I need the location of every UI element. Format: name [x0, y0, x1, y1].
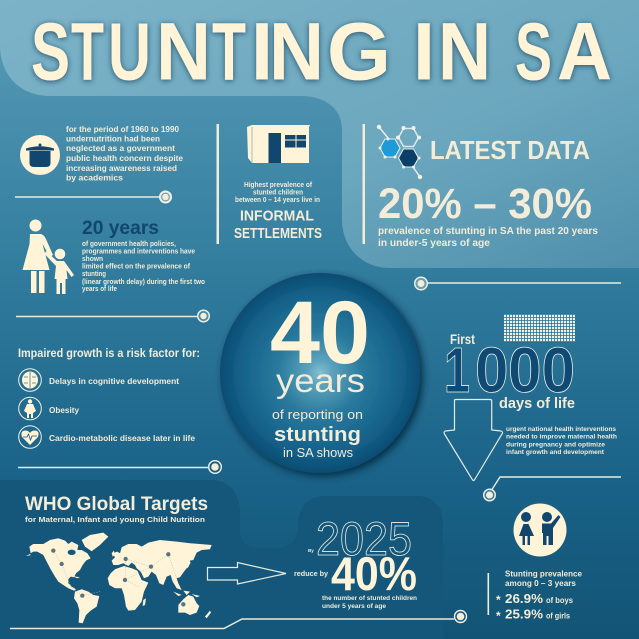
informal settlements block	[234, 125, 322, 242]
text: stunted children	[322, 595, 417, 610]
icon: brain	[19, 369, 41, 391]
text: government policies	[82, 241, 205, 293]
text: neglect of undernutrition	[66, 125, 184, 182]
history text block	[20, 125, 184, 182]
text: stunting prevalence: Stunting prevalence	[505, 568, 582, 578]
icon: boy and girl	[514, 504, 566, 556]
stat: 40 percent: 40%	[331, 547, 417, 600]
stunting prevalence block	[488, 504, 582, 623]
title: N	[438, 6, 491, 98]
text: prevalence	[378, 226, 598, 249]
text: stunting prevalence	[505, 568, 582, 588]
title: S	[31, 6, 70, 98]
text: neglect of undernutrition: by academics	[66, 174, 124, 182]
title: I	[413, 6, 435, 98]
text: first: First	[450, 332, 475, 347]
text: government policies: of government health policies,	[82, 241, 176, 248]
latest data block	[377, 125, 598, 249]
stat: 20% to 30%: 20% – 30%	[378, 180, 592, 228]
text: days of life: days of life	[499, 396, 575, 412]
heading: 20 years: 20 years	[82, 218, 159, 239]
text: stunted children: the number of stunted children	[322, 595, 417, 602]
text: neglect of undernutrition: neglected as a government	[66, 144, 175, 153]
text: neglect of undernutrition: increasing awareness raised	[66, 164, 177, 173]
central circle: 40 years: 40	[270, 282, 370, 382]
text: urgent interventions: urgent national health interventions	[506, 426, 616, 433]
text: government policies: stunting	[82, 271, 106, 278]
text: reduce by: reduce by	[294, 571, 328, 578]
arrow: right	[208, 562, 286, 584]
text: neglect of undernutrition: undernutrition had been	[66, 134, 160, 144]
stat: 1000: 0	[542, 334, 575, 406]
text: urgent interventions: during pregnancy and optimize	[506, 442, 605, 448]
arrow: down	[444, 400, 503, 480]
dot grid	[504, 314, 575, 342]
text: by: By	[308, 548, 314, 553]
text: prevalence: in under-5 years of age	[378, 238, 490, 249]
central circle: 40 years: in SA shows	[283, 446, 353, 460]
stat: boys: of boys	[546, 595, 573, 605]
world map	[26, 533, 212, 623]
text: informal settlements: Highest prevalence of	[244, 182, 313, 189]
stat: girls: *	[496, 609, 501, 623]
WHO block	[25, 494, 417, 623]
icon: heart	[19, 426, 41, 448]
central circle: 40 years	[220, 273, 420, 473]
title: T	[71, 6, 104, 98]
text: urgent interventions: needed to improve maternal health	[506, 434, 617, 440]
title: U	[108, 6, 151, 98]
title: A	[557, 6, 612, 98]
text: government policies: (linear growth delay) during the first two	[82, 279, 205, 286]
stat: girls: of girls	[546, 610, 570, 620]
stat: 2025: 2025	[316, 512, 412, 565]
text: government policies: programmes and interventions have	[82, 248, 195, 256]
icon: molecule	[377, 125, 422, 179]
stat: 1000: 0	[508, 334, 542, 406]
text: subheading: for Maternal, Infant and young Child Nutrition	[25, 515, 205, 524]
heading: impaired growth: Impaired growth is a risk factor for:	[18, 348, 200, 360]
text: government policies: years of life	[82, 286, 117, 293]
stat: 1000: 0	[475, 334, 508, 406]
title: I	[251, 6, 273, 98]
20 years block	[22, 218, 205, 294]
text: informal settlements: SETTLEMENTS	[234, 225, 322, 242]
text: informal settlements: between 0 – 14 years live in	[235, 197, 320, 204]
text: informal settlements	[234, 182, 322, 242]
text: neglect of undernutrition: public health concern despite	[66, 154, 184, 163]
central circle: 40 years: years	[276, 362, 365, 399]
panel: title and latest data	[0, 0, 639, 268]
text: government policies: limited effect on the prevalence of	[82, 264, 191, 270]
stat: boys: *	[496, 593, 501, 607]
title: G	[327, 6, 391, 98]
text: government policies: shown	[82, 256, 103, 263]
text: obesity: Obesity	[49, 405, 79, 415]
title: S	[515, 6, 552, 98]
risk factors block	[18, 348, 200, 448]
text: informal settlements: stunted children	[253, 190, 303, 196]
heading: WHO global targets: WHO Global Targets	[25, 494, 208, 515]
title: N	[156, 6, 211, 98]
text: urgent interventions	[506, 426, 617, 456]
central circle: 40 years: of reporting on	[272, 407, 363, 422]
stat: girls: 25.9%	[505, 606, 543, 622]
title: T	[212, 6, 246, 98]
panel: WHO targets	[0, 480, 443, 639]
text: urgent interventions: infant growth and development	[506, 449, 605, 456]
text: informal settlements: INFORMAL	[240, 208, 314, 224]
central circle: 40 years: stunting	[274, 424, 361, 446]
text: cognitive: Delays in cognitive development	[49, 376, 179, 386]
icon: obesity	[19, 397, 41, 420]
stat: boys	[496, 591, 573, 607]
text: stunting prevalence: among 0 – 3 years	[505, 578, 576, 588]
icon: mother and child	[22, 220, 74, 294]
stat: boys: 26.9%	[505, 591, 543, 606]
heading: latest data: LATEST DATA	[430, 135, 590, 165]
text: stunted children: under 5 years of age	[322, 603, 386, 610]
text: neglect of undernutrition: for the period of 1960 to 1990	[66, 125, 180, 134]
stat: girls	[496, 606, 570, 623]
stat: 1000: 1	[444, 334, 470, 406]
icon: shack	[247, 125, 310, 163]
title: N	[269, 6, 324, 98]
text: cardio-metabolic: Cardio-metabolic disease later in life	[49, 433, 195, 443]
text: prevalence: prevalence of stunting in SA the past 20 years	[378, 226, 598, 237]
first 1000 days block	[444, 314, 617, 480]
icon: cooking pot	[20, 135, 60, 175]
